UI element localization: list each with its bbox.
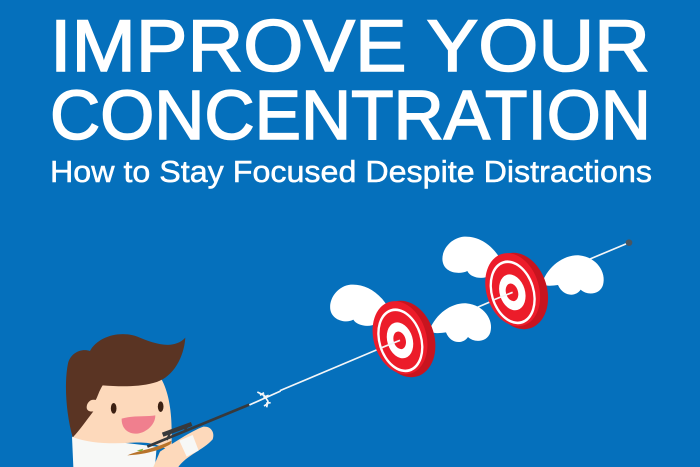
shirt: [72, 437, 157, 467]
title: IMPROVE YOUR: [50, 6, 650, 87]
rifle scope: [163, 424, 192, 435]
shirt cuff: [179, 435, 199, 457]
ear: [86, 400, 96, 411]
arrow and muzzle flash: [249, 391, 281, 407]
flying target 1: [330, 285, 491, 385]
eyes: [111, 403, 116, 414]
target rings: [480, 245, 557, 337]
wings: [330, 285, 491, 342]
hair: [66, 334, 185, 437]
arrow shaft through targets: [280, 239, 632, 391]
wings: [442, 237, 604, 295]
face: [73, 377, 172, 452]
title: [50, 6, 651, 154]
hand and arm: [153, 427, 213, 467]
subtitle: How to Stay Focused Despite Distractions: [50, 154, 652, 189]
flying target 2: [442, 237, 604, 337]
mouth: [122, 415, 155, 434]
rifle barrel: [147, 405, 249, 447]
title: CONCENTRATION: [50, 76, 651, 154]
character: archer with rifle: [66, 334, 281, 467]
rifle stock: [127, 441, 172, 455]
target rings: [368, 293, 444, 385]
